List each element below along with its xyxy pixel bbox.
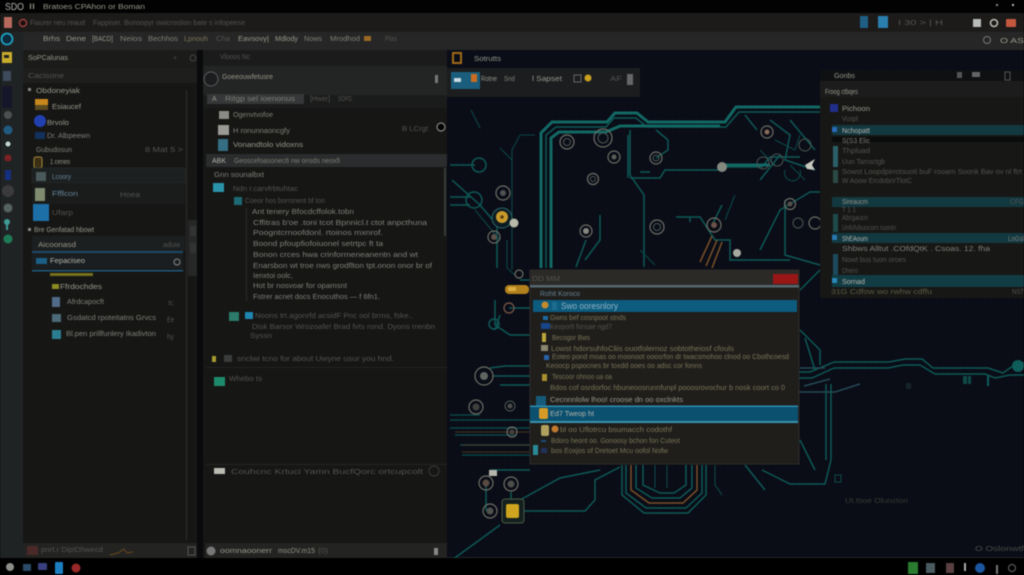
- tree: section rows: Fepaciseo: [50, 258, 85, 265]
- section: general: Sowst Loopdpirrotsuoti buF rooarn Soonk Bav ov nl ftrt: [842, 169, 1022, 176]
- text block: description: Cffitras b'oe .toni tcot Bpnnicl.t ctot anpcthuna: [253, 220, 427, 227]
- header row: search: A: [212, 96, 217, 103]
- list block one: Keoporlt fonsae ngd7: [550, 324, 612, 331]
- section: stream: Sireaucm: [842, 199, 868, 206]
- list block one: Lowst hdorsuhfoCliis ouotfolernoz sobtotheiosf cfouls: [551, 346, 735, 353]
- list block two: Bdos cof osrdorfoc hbuneoosrunnfunpl pooosrovochur b nosk coort co 0: [550, 385, 785, 392]
- tree: section rows: Ee: [167, 317, 174, 324]
- scrollbar: [188, 220, 197, 276]
- list block three: bl oo Uflotrcu bsumacch codothf: [560, 427, 672, 434]
- text block: description: Fstrer acnet docs Enocuthos — f 6fn1.: [253, 294, 380, 301]
- list: files: B LCrgt: [402, 126, 428, 133]
- tree: section rows: hy: [167, 334, 174, 341]
- tree: selected rows: [32, 168, 185, 221]
- panel: right properties: [820, 70, 1024, 298]
- tree: project items: Brvolo: [47, 120, 69, 127]
- header row: search: [203, 94, 447, 108]
- hint row: [206, 355, 447, 368]
- text block: description: Bonon crces hwa crinformeneanentn and wt: [253, 252, 418, 259]
- text block: description: Coeor hos borrsnent bf ton: [245, 198, 325, 205]
- section: stream: Unfofvbuncorn tuontn: [842, 225, 896, 232]
- section: general: Pichoon: [842, 106, 870, 113]
- list block three: bos Eoxjos of Dretoet Mcu oofol Nofw: [551, 448, 669, 455]
- taskbar icons right: [908, 562, 1016, 574]
- header row: search: SDPD: [338, 96, 352, 103]
- text block: description: Hot br nosvoar for opamsnt: [253, 283, 347, 290]
- tree: project items: 8 Mat 5 >: [145, 147, 183, 154]
- list block one: Keoocp pspocnes br toxdd ooes oo adsc cor fonns: [546, 363, 702, 370]
- status row: (0): [318, 548, 328, 555]
- list: files: Vonandtolo vidoxns: [233, 142, 304, 149]
- canvas toolbar: AF: [610, 76, 622, 83]
- section: general: Uun Tarroctgb: [842, 159, 885, 166]
- icon and label: website: Whebo ts: [229, 376, 263, 383]
- faint canvas labels: O Oslonwtf: [975, 546, 1024, 553]
- text block: note: Syssn: [250, 333, 272, 340]
- tree: project items: 1 ceneo: [50, 159, 70, 166]
- upper toolbar: [0, 13, 1024, 32]
- header row: search: [Hwer]: [310, 96, 330, 103]
- window title bar: DD MM: [532, 276, 560, 283]
- text block: description: Boond pfoupfiofoiuonel setrtpc ft ta: [253, 241, 383, 248]
- canvas toolbar: l Sapset: [532, 76, 562, 83]
- section: general: [830, 104, 1024, 185]
- tree: section rows: Ffrdochdes: [60, 284, 103, 291]
- section: general: Thpluad: [842, 148, 870, 155]
- list block one: Becogor Bws: [552, 335, 590, 342]
- window title bar: [530, 270, 799, 288]
- text block: note: Noons trt.agonrfd acsidF Pnc ool brrns, fske..: [255, 313, 413, 320]
- panel: left explorer sidebar: Cacisone: [28, 73, 64, 80]
- text block: description: Ienxtoi oolc,: [253, 273, 293, 280]
- panel: middle document panel: [203, 50, 447, 558]
- tree: section rows: Bre Genfatad hbowt: [34, 227, 94, 234]
- section: sornad: Sornad: [842, 279, 865, 286]
- lower toolbar menu: [0, 32, 1024, 50]
- panel: middle document panel: Goeeouwfetusre: [222, 74, 273, 81]
- section: stream: T 1 1: [842, 207, 856, 214]
- sidebar status row: [23, 543, 197, 558]
- circuit nodes: [466, 126, 821, 523]
- panel: dialog window: [530, 270, 799, 464]
- lower toolbar menu: Eavsovy|: [238, 36, 269, 43]
- section: sornad: 31G Cdfow wo rwhw cdffu: [831, 289, 932, 296]
- top title bar: SDO: [5, 2, 24, 13]
- tree: project items: Dr. Albpeewn: [47, 133, 90, 140]
- list block one: [541, 315, 789, 370]
- section: sornad: [831, 275, 1024, 296]
- tree: section rows: s;: [168, 300, 174, 307]
- list: files: H ronunnaoncgfy: [233, 128, 291, 135]
- panel: left explorer sidebar: SoPCalunas: [28, 55, 69, 62]
- text block: note: Disk Barsor Wrozoafe! Brad fvts rond. Dyons rrenbn: [252, 324, 435, 331]
- lower toolbar menu: Bechhos: [148, 36, 179, 43]
- tree: section rows: Afrdcapocft: [67, 299, 104, 306]
- text block: description: Enarsbon wt troe nws grodflton tpt.onon onor br of: [253, 263, 432, 270]
- list block one: Eoteo pond moas oo moonoot ooosrfon dr twacsmohoo clnod oo Cbothcoesd: [552, 354, 789, 361]
- lower toolbar menu: Brhs: [43, 36, 61, 43]
- lower toolbar menu: Cha: [216, 36, 230, 43]
- tree: project items: Gubudosun: [36, 147, 72, 154]
- list block three: Bdoro heont oo. Gonoosy bchon fon Cuteot: [551, 438, 680, 445]
- icon and label: website: [214, 376, 263, 386]
- upper toolbar: Fiaurer neu reaud: [30, 20, 85, 27]
- status row: [205, 543, 447, 558]
- taskbar icons left: [6, 562, 80, 574]
- canvas toolbar: [447, 68, 640, 97]
- footer note row: [206, 464, 447, 476]
- list block one: Gwns bef cosnpoot stnds: [550, 315, 626, 322]
- lower toolbar menu: Mdlody: [275, 36, 298, 43]
- section: general: S(S3 Elic: [842, 138, 870, 145]
- canvas heading: [453, 53, 502, 63]
- tree: selected rows: Lcoory: [52, 174, 71, 181]
- lower toolbar menu: Lpnouh: [184, 36, 208, 43]
- list block two: [536, 374, 785, 406]
- header row: search: Ritgp sel ioenonus: [225, 96, 296, 103]
- tree: selected rows: Ffflcon: [52, 191, 78, 198]
- highlighted row 2: [530, 406, 798, 423]
- circuit traces: [450, 107, 1024, 560]
- tree: selected rows: Ufarp: [52, 210, 73, 217]
- faint canvas labels: [845, 498, 1024, 553]
- canvas toolbar: Rotne: [481, 76, 497, 83]
- lower toolbar menu: Mrodhod: [330, 36, 360, 43]
- panel: middle document panel: Vlooos Nc: [220, 54, 250, 61]
- upper toolbar: I 30 > | H: [898, 20, 943, 27]
- tree: section rows: Gsdatcd rpoteitatns Grvcs: [67, 315, 157, 322]
- status row: mscDV.m15: [278, 548, 315, 555]
- lower toolbar menu: O AS: [1000, 38, 1024, 45]
- text block: description: Gnn sounalbxt: [214, 172, 264, 179]
- tree: selected rows: Hoea: [120, 192, 140, 199]
- panel: left explorer sidebar: [23, 50, 197, 558]
- highlighted section row: Geoscefoasonec6 nw onsds neoxfi: [234, 158, 340, 165]
- tree: section rows: [28, 227, 185, 341]
- section: general: W Aoow ErcdobnrTlotC: [842, 178, 912, 185]
- top title bar: ll: [29, 4, 36, 11]
- top title bar: Bratoes CPAhon or Boman: [43, 4, 145, 11]
- list block two: Tescoor ohnoo ua oa: [552, 374, 612, 381]
- taskbar: [0, 558, 1024, 575]
- section: general: Nchopatt: [842, 128, 870, 135]
- tree: project items: Obdoneyiak: [36, 88, 81, 95]
- section: shbows: Nowt bus tuon oroes: [842, 257, 906, 264]
- highlighted section row: ABK: [212, 158, 226, 165]
- panel: dialog window: Rohit Koroco: [540, 291, 580, 298]
- activity bar: [0, 32, 23, 558]
- top title bar: [0, 0, 1024, 13]
- canvas heading: Sotrutts: [474, 56, 502, 63]
- section: shbows: [832, 233, 1024, 276]
- upper toolbar: Fappiser. Bunoopyr owicrostion bate s infopeese: [93, 20, 245, 27]
- status row: oomnaoonerr: [220, 548, 273, 555]
- footer note row: Couhcnc Krtuci Yamn BucfQorc ortcupcolt: [231, 469, 423, 476]
- tree: section rows: Aicoonasd: [38, 242, 76, 249]
- text block: description: Poogntcrnoofdonl. rtoinos mxnrof.: [253, 230, 383, 237]
- text block: description: Ant tenery Bfocdcffolok.tobn: [252, 209, 354, 216]
- lower toolbar menu: Dene: [66, 36, 86, 43]
- lower toolbar menu: [BACD]: [92, 36, 113, 43]
- list: files: Ogenvtvofoe: [233, 112, 273, 119]
- list block two: Cecnnnlolw lhoo! croose dn oo oxclnkts: [550, 397, 684, 404]
- canvas toolbar: Snd: [504, 76, 515, 83]
- panel: right properties: Froog ctbqes: [825, 89, 858, 96]
- divider between panels: [197, 50, 203, 558]
- tree: project items: Esiaucef: [52, 104, 81, 111]
- list: files: [218, 111, 445, 151]
- section: shbows: Dhero: [842, 268, 858, 275]
- panel: left explorer sidebar: +: [173, 55, 177, 62]
- panel: right properties: Gonbs: [834, 73, 856, 80]
- highlighted row 1: Swo ooresnlory: [561, 301, 618, 311]
- tree: project items: [28, 88, 183, 168]
- text block: note: [229, 312, 435, 340]
- section: shbows: Shbws Alltut .COfdQtK . Csoas. 12. fha: [842, 246, 990, 253]
- text block: description: Ndn r.carvfrbtuhtac: [233, 186, 299, 193]
- highlighted row 1: [533, 300, 797, 312]
- section: stream: Abrgaucn: [842, 215, 868, 222]
- text block: description: [213, 172, 432, 301]
- list block three: [533, 425, 680, 455]
- sidebar status row: pnrt.r DiptDhwecd: [41, 547, 103, 554]
- panel: circuit canvas: [447, 50, 1024, 560]
- section: shbows: ShEAoum: [842, 236, 868, 243]
- lower toolbar menu: Plas: [385, 36, 397, 43]
- highlighted section row: [206, 154, 447, 236]
- section: stream: [832, 197, 1024, 232]
- tree: section rows: Bl.pen prillfunlery Ikadivton: [66, 331, 156, 338]
- hint row: snclwi tcno for about Uwyne usur you hnd.: [237, 356, 394, 363]
- tree: section rows: aduw: [163, 242, 181, 249]
- section: general: Vuspl: [842, 116, 858, 123]
- faint canvas labels: Ut.ttioe Oluncton: [845, 498, 908, 505]
- highlighted row 2: Ed7 Tweop ht: [550, 411, 594, 418]
- lower toolbar menu: Nows: [304, 36, 323, 43]
- lower toolbar menu: Neios: [120, 36, 143, 43]
